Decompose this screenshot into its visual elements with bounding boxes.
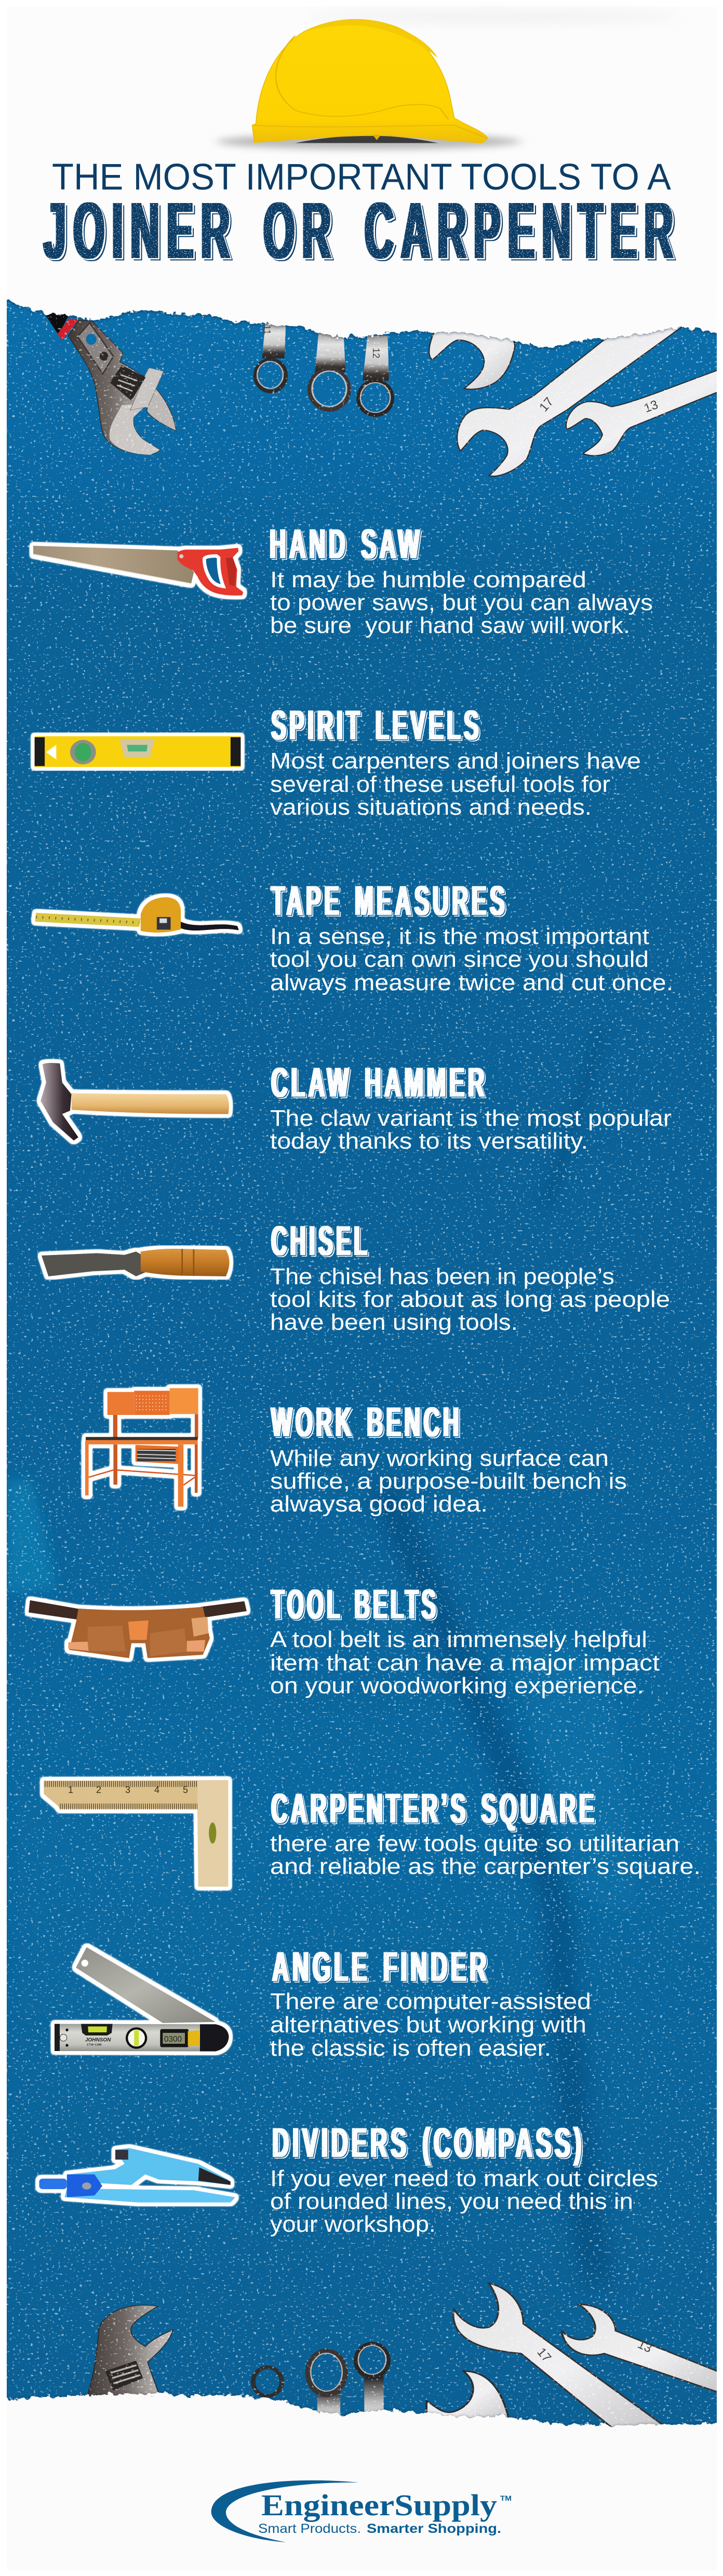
item: carpenter's square [44, 1780, 701, 1886]
icon: yellow hard hat [217, 19, 521, 150]
icon: hand saw [33, 546, 243, 596]
text: tool belts: item that can have a major impact [270, 1650, 660, 1676]
text: dividers (compass) [270, 2166, 658, 2237]
icon: tape measure [35, 897, 239, 933]
tools: bottom border [85, 2283, 723, 2433]
logo: EngineerSupply: TM [500, 2494, 512, 2502]
title [44, 157, 680, 275]
item: spirit levels [35, 702, 641, 820]
text: carpenter's square: and reliable as the carpenter’s square. [270, 1854, 701, 1879]
text: spirit levels: Most carpenters and joiners have [270, 748, 641, 774]
text: tape measures: always measure twice and cut once. [270, 970, 673, 995]
item: chisel [42, 1218, 670, 1335]
text: carpenter's square: there are few tools quite so utilitarian [270, 1831, 679, 1856]
heading: claw hammer: CLAW HAMMER [271, 1059, 488, 1106]
icon: work bench [85, 1388, 198, 1507]
heading: spirit levels: SPIRIT LEVELS [271, 702, 482, 749]
heading: tape measures: TAPE MEASURES [271, 878, 508, 924]
label: wrench sizes [262, 325, 660, 415]
item: claw hammer [41, 1059, 672, 1154]
text: tape measures: tool you can own since you should [270, 947, 649, 972]
text: hand saw: be sure your hand saw will work. [270, 613, 630, 638]
text: dividers (compass): If you ever need to mark out circles [270, 2166, 658, 2191]
icon: chisel [42, 1249, 230, 1276]
text: angle finder: the classic is often easier. [270, 2035, 551, 2061]
item: hand saw [33, 521, 653, 638]
item: angle finder [55, 1944, 591, 2061]
icon: spirit level [35, 736, 240, 767]
text: carpenter's square [270, 1831, 701, 1879]
item: work bench [85, 1388, 627, 1517]
heading: work bench: WORK BENCH [271, 1399, 462, 1446]
text: tool belts [270, 1627, 660, 1698]
text: hand saw: It may be humble compared [270, 567, 586, 592]
paper smudge [306, 11, 680, 22]
icon: adjustable wrench top [43, 312, 176, 455]
icon: angle finder: 0300 [164, 2035, 182, 2044]
text: tape measures [270, 924, 673, 995]
icon: angle finder: JOHNSON [85, 2037, 111, 2043]
tools: top border [43, 312, 722, 476]
icon: wrench 13 top [566, 369, 722, 456]
icon: carpenter's square [44, 1780, 228, 1886]
text: hand saw: to power saws, but you can always [270, 590, 653, 615]
icon: carpenter's square: 1 [68, 1785, 73, 1795]
text: dividers (compass): of rounded lines, you need this in [270, 2189, 633, 2214]
text: work bench [270, 1446, 627, 1517]
text: claw hammer: The claw variant is the most popular [270, 1105, 672, 1131]
text: spirit levels [270, 748, 641, 820]
logo: EngineerSupply: EngineerSupply [261, 2488, 497, 2522]
icon: carpenter's square: 2 [96, 1785, 101, 1795]
text: claw hammer [270, 1105, 672, 1154]
icon: claw hammer [41, 1063, 229, 1141]
text: claw hammer: today thanks to its versatility. [270, 1128, 588, 1154]
icon: adjustable wrench bottom [85, 2305, 173, 2401]
icon: carpenter's square: 3 [125, 1785, 130, 1795]
logo: EngineerSupply: Smarter Shopping. [367, 2521, 501, 2536]
text: angle finder: alternatives but working with [270, 2012, 586, 2038]
item: dividers (compass) [39, 2120, 658, 2237]
text: tape measures: In a sense, it is the most important [270, 924, 649, 949]
text: chisel: tool kits for about as long as people [270, 1287, 670, 1312]
text: work bench: While any working surface can [270, 1446, 609, 1471]
text: tool belts: on your woodworking experience. [270, 1673, 644, 1698]
title line 1: THE MOST IMPORTANT TOOLS TO A [52, 157, 672, 198]
icon: open wrench jaw top [429, 326, 515, 389]
item: tool belts [29, 1581, 660, 1698]
text: work bench: alwaysa good idea. [270, 1491, 488, 1517]
heading: hand saw: HAND SAW [270, 521, 423, 568]
icon: carpenter's square: 5 [183, 1785, 188, 1795]
logo: EngineerSupply [211, 2480, 512, 2542]
label: wrench sizes: 13 [642, 398, 660, 415]
text: chisel: have been using tools. [270, 1310, 518, 1335]
icon: angle finder: 1750-1200 [87, 2043, 102, 2046]
icon: ring spanners bottom [253, 2344, 388, 2422]
paper: torn top edge [0, 0, 723, 347]
label: wrench sizes: 12 [371, 348, 381, 358]
text: chisel: The chisel has been in people’s [270, 1264, 614, 1289]
paper: torn bottom edge [0, 2394, 723, 2576]
label: wrench sizes bottom: 13 [635, 2337, 654, 2356]
text: spirit levels: various situations and needs. [270, 794, 592, 820]
label: wrench sizes bottom [534, 2337, 654, 2365]
icon: angle finder [55, 1947, 229, 2052]
label: wrench sizes bottom: 17 [534, 2345, 554, 2365]
logo: EngineerSupply: Smart Products. [258, 2521, 361, 2536]
icon: open wrenches bottom [426, 2283, 723, 2433]
text: hand saw [270, 567, 653, 638]
text: angle finder: There are computer-assisted [270, 1989, 591, 2014]
item: tape measures [35, 878, 673, 995]
icon: ring spanners top [256, 322, 392, 415]
text: work bench: suffice, a purpose-built bench is [270, 1468, 627, 1494]
icon: carpenter's square: 4 [154, 1785, 159, 1795]
heading: angle finder: ANGLE FINDER [272, 1944, 490, 1990]
label: wrench sizes: 11 [262, 325, 272, 334]
heading: chisel: CHISEL [271, 1218, 370, 1264]
icon: tool belt [29, 1600, 247, 1658]
heading: tool belts: TOOL BELTS [271, 1581, 439, 1628]
text: chisel [270, 1264, 670, 1335]
text: tool belts: A tool belt is an immensely helpful [270, 1627, 647, 1652]
text: dividers (compass): your workshop. [270, 2211, 436, 2237]
label: wrench sizes: 17 [537, 395, 556, 414]
text: angle finder [270, 1989, 591, 2061]
text: spirit levels: several of these useful tools for [270, 772, 610, 797]
icon: wrench 17 top [457, 326, 684, 476]
icon: dividers [39, 2148, 235, 2203]
